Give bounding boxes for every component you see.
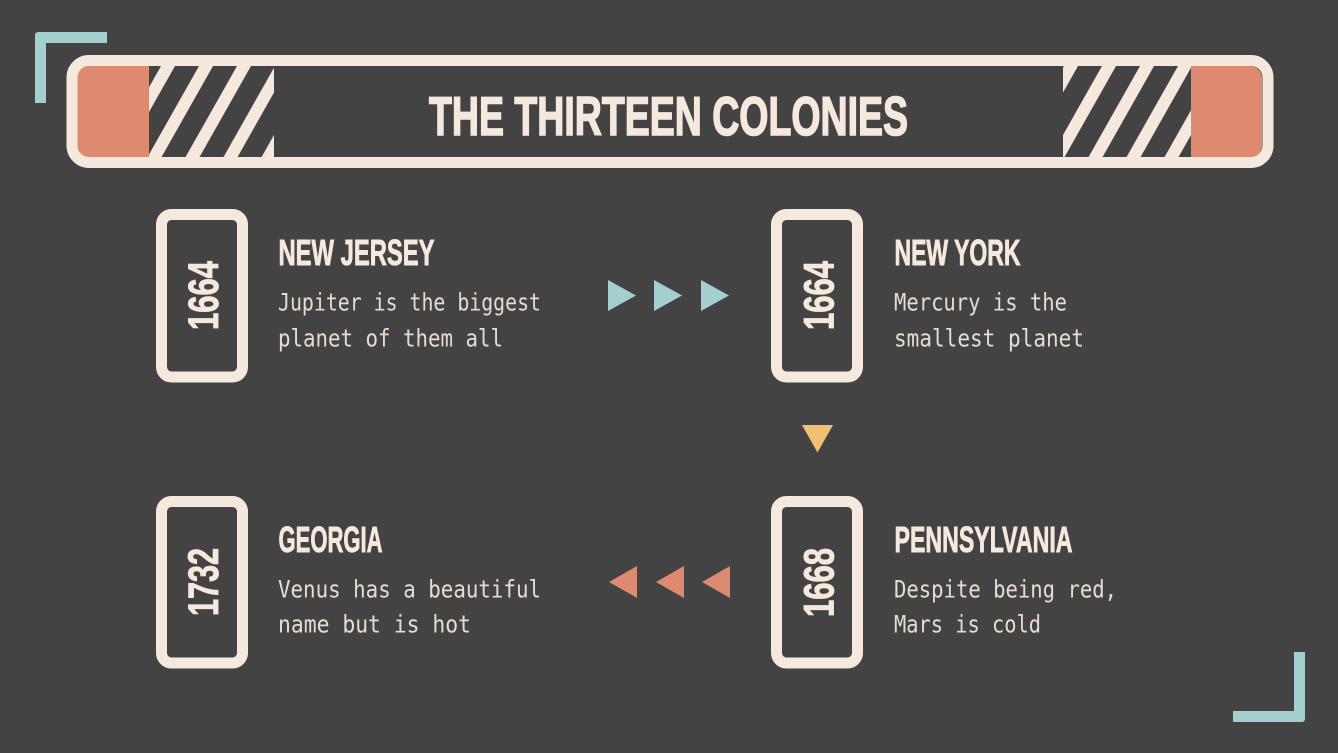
heading: NEW JERSEY: [278, 232, 434, 273]
heading: GEORGIA: [278, 519, 382, 560]
entry: New Jersey: [162, 214, 541, 377]
description: Jupiter is the biggest: [278, 288, 541, 316]
year: 1668: [796, 548, 844, 617]
year: 1664: [796, 261, 844, 330]
banner outline: [72, 60, 1268, 162]
description: smallest planet: [894, 324, 1084, 352]
description: Venus has a beautiful: [278, 576, 541, 604]
arrows: teal right: [608, 280, 729, 311]
left coral block: [77, 66, 149, 158]
title banner: [72, 60, 1268, 162]
arrow: yellow down: [802, 425, 833, 452]
description: Despite being red,: [894, 576, 1117, 604]
right coral block: [1191, 66, 1262, 158]
year box: [776, 214, 858, 377]
description: Mercury is the: [894, 288, 1067, 316]
description: name but is hot: [278, 610, 471, 638]
description: planet of them all: [278, 324, 503, 352]
entry: Pennsylvania: [776, 502, 1117, 663]
year: 1664: [180, 261, 228, 330]
left stripes: [149, 66, 274, 157]
heading: NEW YORK: [894, 232, 1021, 273]
title: THE THIRTEEN COLONIES: [429, 86, 908, 147]
year box: [162, 214, 242, 377]
description: Mars is cold: [894, 610, 1041, 638]
corner bracket: bottom right: [1233, 652, 1305, 722]
year: 1732: [180, 548, 228, 616]
corner bracket: top left: [35, 32, 107, 103]
arrows: coral left: [609, 566, 730, 598]
entry: New York: [776, 214, 1084, 377]
heading: PENNSYLVANIA: [894, 519, 1072, 560]
year box: [162, 502, 242, 663]
year box: [776, 502, 858, 663]
right stripes: [1063, 66, 1191, 157]
entry: Georgia: [162, 502, 541, 663]
